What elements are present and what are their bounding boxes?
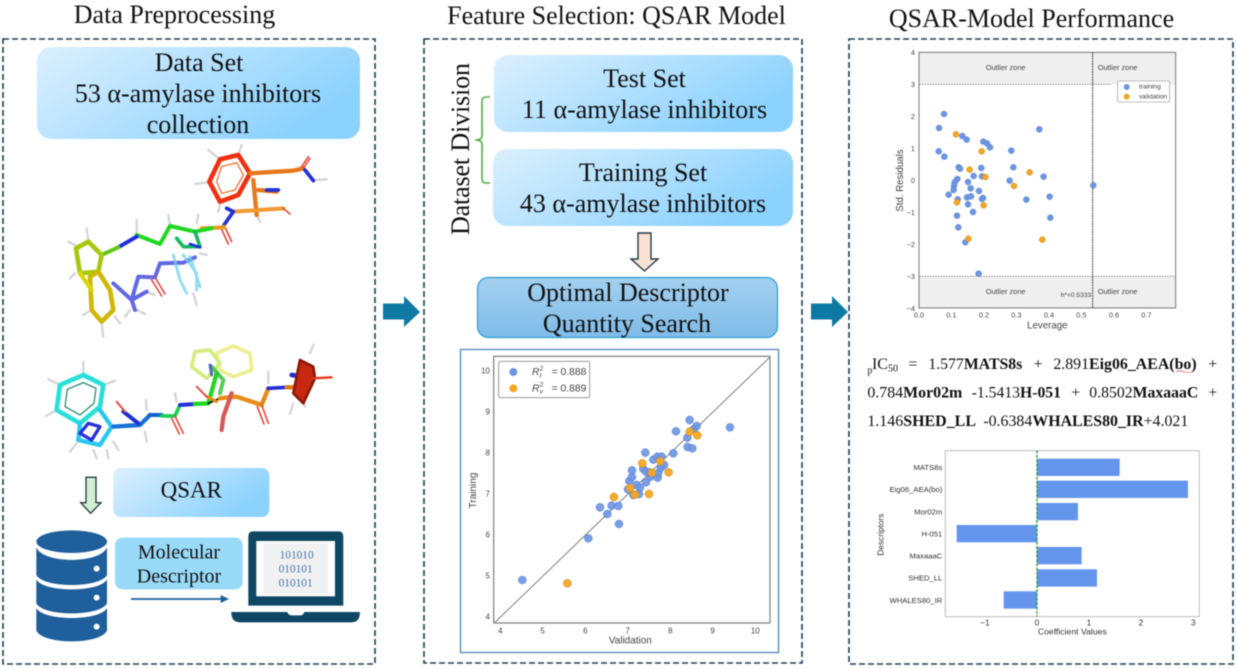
y ticks and axis: 6 [486, 531, 491, 540]
training set box: 43 α-amylase inhibitors [520, 189, 766, 218]
legend: R [532, 383, 540, 394]
y axis: 0 [911, 176, 915, 185]
preprocessing workflow [36, 468, 360, 641]
x axis: Coefficient Values [1038, 626, 1107, 636]
optimal descriptor box [478, 278, 778, 338]
x ticks and axis: 7 [625, 626, 630, 635]
x axis: 0.4 [1044, 310, 1054, 319]
x axis: 0.1 [946, 310, 956, 319]
icon: laptop: 101010 [280, 550, 314, 562]
legend [499, 361, 590, 398]
y axis [895, 48, 915, 313]
chart frame [460, 350, 778, 652]
y axis: 3 [911, 80, 915, 89]
data set box [37, 47, 360, 139]
panel: data preprocessing [3, 39, 375, 664]
equation: 2.891Eig06_AEA(bo) [1053, 356, 1197, 373]
data set box: 53 α-amylase inhibitors [75, 79, 321, 108]
equation: -1.5413H-051 [972, 384, 1061, 401]
outlier labels: Outlier zone [1098, 63, 1137, 72]
equation: -0.6384WHALES80_IR+4.021 [983, 413, 1188, 430]
arrow: green down [81, 477, 101, 513]
bars [957, 459, 1188, 609]
x axis: 2 [1139, 618, 1144, 628]
outlier labels: Outlier zone [986, 287, 1025, 296]
data set box: collection [147, 110, 249, 139]
validation points [953, 131, 1045, 243]
arrow: to laptop [131, 595, 229, 603]
x axis: 3 [1191, 618, 1196, 628]
legend: R [532, 367, 540, 378]
x axis: 0.7 [1141, 310, 1151, 319]
y ticks and axis: 10 [481, 367, 491, 376]
y axis: Std. Residuals [895, 149, 906, 212]
x axis: −1 [980, 618, 990, 628]
training points [518, 416, 734, 584]
y axis: −3 [907, 272, 915, 281]
x axis: 0 [1035, 618, 1040, 628]
molecular descriptor box: Molecular [138, 542, 220, 564]
training set box [493, 149, 793, 226]
descriptor labels: MaxaaaC [910, 552, 943, 561]
equation: IC [872, 356, 888, 373]
x axis: Leverage [1027, 320, 1067, 331]
x ticks and axis: 6 [583, 626, 588, 635]
heading: Feature Selection: Feature Selection: QSAR Model [447, 1, 786, 30]
x axis: 0.3 [1011, 310, 1021, 319]
icon: database [36, 530, 107, 641]
outlier labels: Outlier zone [986, 63, 1025, 72]
molecule: bottom [46, 345, 332, 458]
validation points [563, 428, 701, 587]
x axis: 0.5 [1076, 310, 1086, 319]
descriptor labels: WHALES80_IR [890, 596, 943, 605]
descriptor labels: Mor02m [914, 507, 942, 516]
equation: 0.784Mor02m [867, 384, 963, 401]
x axis: 0.0 [914, 310, 924, 319]
chart: training vs validation scatter [468, 356, 770, 647]
icon: laptop: 010101 [279, 577, 313, 589]
x ticks and axis: Validation [609, 636, 652, 647]
equation: + [1071, 384, 1080, 401]
outlier labels: Outlier zone [1098, 287, 1137, 296]
arrow: down [631, 233, 658, 271]
heading: QSAR-Model Performance: QSAR-Model Performance [889, 4, 1174, 33]
panel: feature selection [424, 39, 802, 663]
y ticks and axis: 7 [486, 490, 491, 499]
bracket [475, 97, 490, 183]
data set box: Data Set [155, 48, 244, 77]
y axis: 4 [911, 48, 915, 57]
x ticks and axis: 9 [710, 626, 715, 635]
legend [1118, 81, 1170, 102]
legend: v [540, 389, 544, 396]
equation: = [908, 356, 917, 373]
x axis: 1 [1087, 618, 1092, 628]
icon: laptop: 010101 [279, 563, 313, 575]
y ticks and axis [468, 367, 491, 622]
y ticks and axis: 5 [486, 572, 491, 581]
arrow: panel 1 to panel 2 [383, 296, 420, 327]
y axis: −2 [907, 240, 915, 249]
x axis: 0.2 [979, 310, 989, 319]
optimal descriptor box: Optimal Descriptor [527, 278, 729, 307]
legend: t [540, 372, 543, 379]
equation [867, 356, 1217, 430]
QSAR label box [113, 468, 269, 517]
y axis: 1 [911, 144, 915, 153]
descriptor labels: Eig06_AEA(bo) [890, 485, 943, 494]
descriptor labels: MATS8s [914, 463, 942, 472]
equation: p [867, 366, 872, 377]
heading: Data Preprocessing: Data Preprocessing [74, 0, 275, 29]
x ticks and axis: 10 [751, 626, 760, 635]
legend: = 0.889 [552, 383, 587, 394]
descriptor labels [890, 463, 943, 605]
optimal descriptor box: Quantity Search [543, 309, 711, 338]
molecular descriptor box [115, 538, 243, 589]
test set box: Test Set [603, 64, 687, 93]
training points [936, 111, 1096, 277]
y ticks and axis: 8 [486, 449, 491, 458]
equation: + [1034, 356, 1043, 373]
equation: 1.146SHED_LL [867, 413, 976, 430]
equation: 1.577MATS8s [928, 356, 1022, 373]
legend: training [1139, 84, 1161, 91]
y ticks and axis: Training [468, 473, 479, 508]
x ticks and axis [498, 626, 760, 647]
descriptor labels: SHED_LL [908, 574, 942, 583]
arrow: panel 2 to panel 3 [811, 296, 848, 327]
legend: 2 [540, 382, 544, 389]
y ticks and axis: 4 [486, 613, 491, 622]
icon: laptop [231, 531, 360, 622]
molecule: top [68, 145, 327, 337]
test set box: 11 α-amylase inhibitors [522, 95, 767, 124]
test set box [494, 55, 793, 132]
equation: 50 [888, 364, 898, 375]
equation and bar chart group [867, 356, 1217, 636]
y ticks and axis: 9 [486, 408, 491, 417]
outlier labels [986, 63, 1137, 299]
y axis: −4 [907, 304, 915, 313]
bar chart [876, 451, 1199, 636]
x ticks and axis: 8 [668, 626, 673, 635]
x ticks and axis: 4 [498, 626, 503, 635]
QSAR label box: QSAR [161, 477, 223, 502]
equation: + [1208, 356, 1217, 373]
descriptor labels: H-051 [921, 529, 942, 538]
y axis: −1 [907, 208, 915, 217]
dataset division label: Dataset Division [446, 63, 475, 235]
chart: williams plot [895, 48, 1176, 331]
equation: + [1208, 384, 1217, 401]
bar chart: Descriptors [876, 514, 886, 556]
x axis [914, 310, 1151, 331]
panel: model performance [849, 39, 1233, 664]
x axis [980, 618, 1196, 636]
legend: validation [1139, 93, 1167, 100]
outlier labels: h*=0.5333 [1061, 292, 1092, 299]
legend: 2 [540, 365, 544, 372]
training set box: Training Set [579, 158, 708, 187]
x ticks and axis: 5 [540, 626, 545, 635]
molecular descriptor box: Descriptor [137, 566, 221, 588]
equation: 0.8502MaxaaaC [1089, 384, 1198, 401]
x axis: 0.6 [1109, 310, 1119, 319]
y axis: 2 [911, 112, 915, 121]
legend: = 0.888 [552, 367, 587, 378]
